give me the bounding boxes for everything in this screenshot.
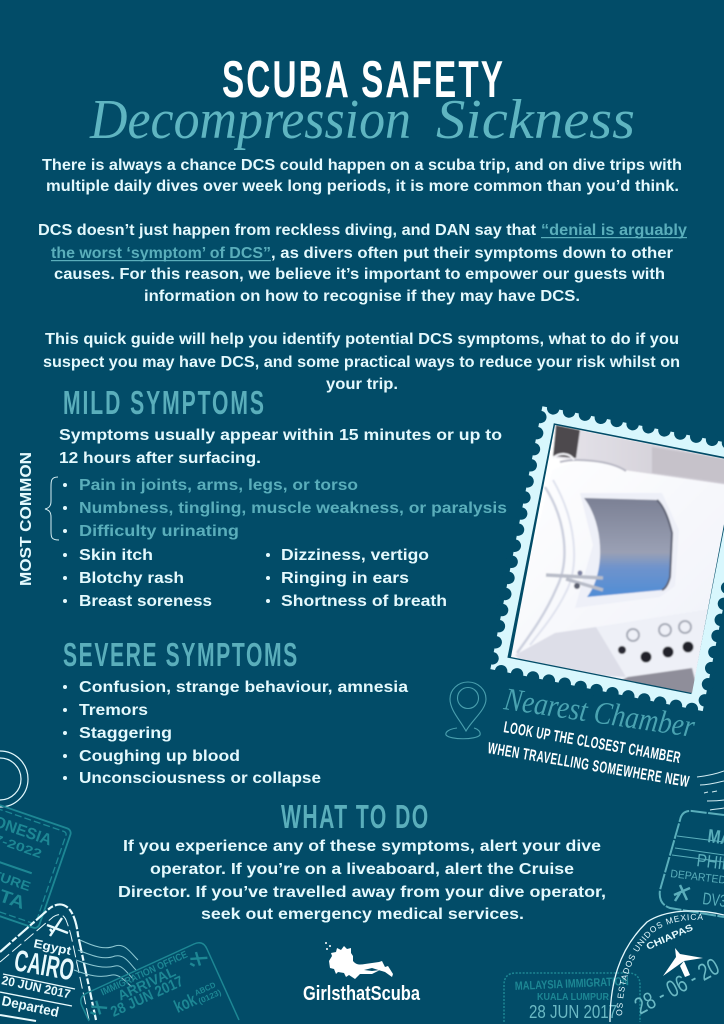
stamp: Philippines departed	[660, 811, 724, 917]
intro text: your trip.	[326, 376, 398, 393]
intro text: , as divers often put their symptoms down to other	[271, 245, 673, 262]
subtitle: Decompression Sickness	[89, 89, 635, 151]
intro text: “denial is arguably	[541, 222, 687, 239]
callout: nearest chamber: LOOK UP THE CLOSEST CHAMBER	[502, 718, 682, 767]
what to do text: seek out emergency medical services.	[201, 906, 524, 923]
title: SCUBA SAFETY	[222, 51, 503, 109]
brace	[45, 477, 59, 540]
stamp: arrival: ABCD	[193, 980, 217, 998]
list: other mild symptoms, column 2: Shortness of breath	[281, 593, 447, 610]
postage stamp photo of hyperbaric chamber	[490, 406, 724, 711]
intro text: multiple daily dives over week long periods, it is more common than you’d think.	[46, 178, 679, 195]
list: other mild symptoms, column 1: Breast soreness	[79, 593, 212, 610]
stamp: Malaysia immigration: 28 JUN 2017	[529, 1002, 617, 1022]
callout: nearest chamber	[486, 680, 698, 791]
callout: nearest chamber: Nearest Chamber	[501, 680, 698, 744]
list: severe symptoms: Unconsciousness or collapse	[79, 770, 321, 787]
stamp: Malaysia immigration: KUALA LUMPUR	[537, 992, 610, 1003]
list: severe symptoms	[63, 679, 408, 787]
subtitle: Decompression Sickness: Sickness	[436, 89, 635, 151]
stamp: Chiapas Mexico: OS ESTADOS UNIDOS MEXICA	[616, 914, 703, 1016]
intro text: There is always a chance DCS could happen on a scuba trip, and on dive trips with	[42, 157, 682, 174]
heading: mild symptoms: MILD SYMPTOMS	[63, 384, 264, 421]
list: most common symptoms	[63, 477, 507, 540]
handle	[546, 575, 603, 590]
list: other mild symptoms, column 1: Skin itch	[79, 547, 153, 564]
stamp: Malaysia immigration	[504, 973, 640, 1022]
intro text: This quick guide will help you identify potential DCS symptoms, what to do if you	[45, 331, 679, 348]
stamp: Malaysia immigration: MALAYSIA IMMIGRATION	[515, 974, 629, 993]
stamp: Indonesia departure	[0, 793, 72, 929]
stamp: arrival	[81, 943, 239, 1021]
stamp: Cairo departed: 20 JUN 2017	[0, 973, 72, 1001]
console	[555, 605, 724, 680]
stamp: arrival: 28 JUN 2017	[108, 973, 186, 1021]
list: most common symptoms: Difficulty urinating	[79, 523, 239, 540]
intro text: causes. For this reason, we believe it’s important to empower our guests with	[54, 266, 665, 283]
logo: diver and GirlsthatScuba: GirlsthatScuba	[303, 983, 421, 1005]
heading: what to do: WHAT TO DO	[281, 798, 428, 835]
icon: diver bubbles	[325, 942, 331, 950]
stamp: white circle left	[0, 751, 28, 807]
mild symptoms timing text	[59, 427, 502, 467]
stamp: Cairo departed: Departed	[0, 992, 60, 1020]
list: most common symptoms: Numbness, tingling, muscle weakness, or paralysis	[79, 500, 507, 517]
stamp: arrival: kok	[171, 989, 200, 1017]
list: severe symptoms: Confusion, strange behaviour, amnesia	[79, 679, 408, 696]
intro text: suspect you may have DCS, and some practical ways to reduce your risk whilst on	[43, 354, 680, 371]
list: severe symptoms: Staggering	[79, 725, 172, 742]
list: other mild symptoms, column 1	[63, 547, 212, 610]
window	[575, 493, 679, 608]
mild symptoms timing text: 12 hours after surfacing.	[59, 450, 261, 467]
callout: nearest chamber: WHEN TRAVELLING SOMEWHERE NEW	[486, 739, 691, 791]
vertical label: most common: MOST COMMON	[18, 452, 35, 586]
mild symptoms timing text: Symptoms usually appear within 15 minutes or up to	[59, 427, 502, 444]
list: other mild symptoms, column 2: Ringing in ears	[281, 570, 409, 587]
stamp: Cairo departed: CAIRO	[12, 944, 77, 987]
heading: severe symptoms: SEVERE SYMPTOMS	[63, 636, 297, 673]
what to do text: Director. If you’ve travelled away from your dive operator,	[118, 884, 606, 901]
intro text: information on how to recognise if they may have DCS.	[144, 288, 580, 305]
stamp: Chiapas Mexico: CHIAPAS	[645, 922, 695, 953]
stamp: Cairo departed	[0, 904, 96, 1021]
list: severe symptoms: Tremors	[79, 702, 148, 719]
stamp: Cairo departed: Egypt	[32, 936, 72, 958]
subtitle: Decompression Sickness: Decompression	[89, 89, 411, 151]
what to do text	[118, 838, 606, 923]
list: most common symptoms: Pain in joints, arms, legs, or torso	[79, 477, 358, 494]
icon: diver	[329, 946, 393, 979]
intro text: the worst ‘symptom’ of DCS”	[51, 245, 271, 262]
stamp: arrival: IMMIGRATION OFFICE	[99, 949, 190, 998]
list: other mild symptoms, column 2: Dizziness, vertigo	[281, 547, 429, 564]
list: other mild symptoms, column 1: Blotchy rash	[79, 570, 184, 587]
what to do text: If you experience any of these symptoms, alert your dive	[123, 838, 601, 855]
postmark wave lines	[74, 940, 138, 987]
stamp: arrival: (0123)	[197, 988, 223, 1006]
list: severe symptoms: Coughing up blood	[79, 748, 240, 765]
what to do text: operator. If you’re on a liveaboard, alert the Cruise	[150, 861, 574, 878]
door edge	[517, 487, 564, 653]
list: other mild symptoms, column 2	[266, 547, 447, 610]
logo: diver and GirlsthatScuba	[303, 946, 421, 1005]
icon: map pin	[446, 682, 486, 739]
intro text	[38, 157, 687, 393]
wavy postmark lines right	[697, 771, 724, 810]
intro text: DCS doesn’t just happen from reckless diving, and DAN say that	[38, 222, 536, 239]
stamp: arrival: ARRIVAL	[115, 963, 178, 1003]
